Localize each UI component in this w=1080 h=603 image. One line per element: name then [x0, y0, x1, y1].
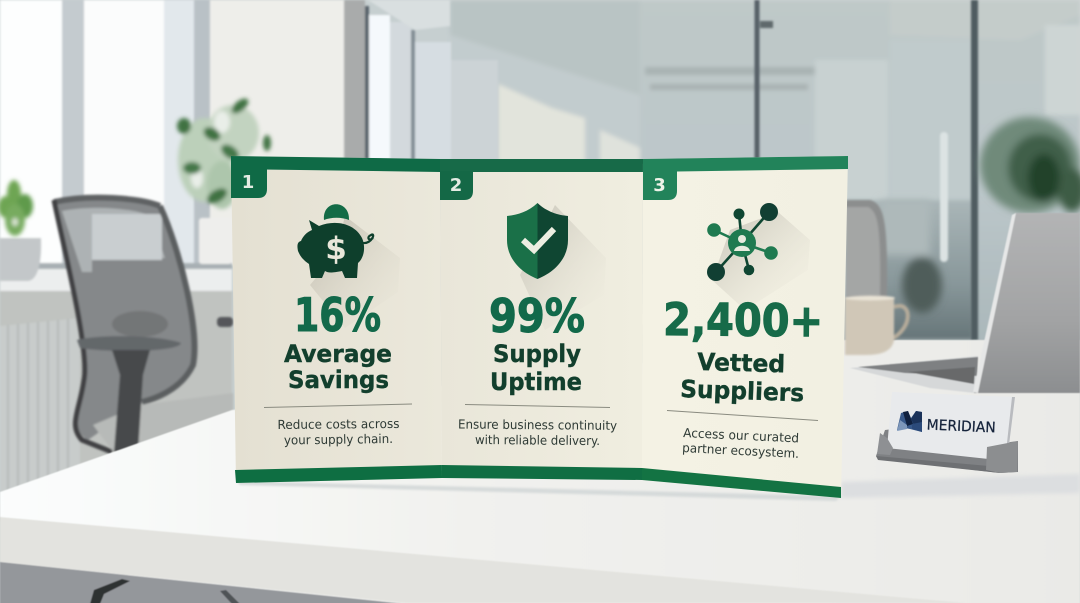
- desk surface: [0, 340, 1080, 603]
- mug: [845, 296, 908, 355]
- plant: window sill: [177, 96, 271, 209]
- description: [458, 417, 618, 448]
- card: [887, 392, 1015, 461]
- description: Ensure business continuity: [458, 417, 618, 433]
- left desk chair: [54, 196, 233, 452]
- icon: shield with check: [507, 203, 606, 330]
- stat 16%: 16%: [294, 288, 381, 342]
- label: supply uptime: Supply: [493, 340, 581, 368]
- panel 2 number tab: 2: [450, 175, 462, 196]
- plant: right behind laptop: [980, 117, 1080, 213]
- panel cast shadow on desk: [841, 474, 1080, 498]
- description: [682, 425, 799, 461]
- panel 1 number tab: 1: [242, 172, 254, 193]
- holder front: [876, 456, 1000, 473]
- panel 3 footer band: [642, 468, 841, 498]
- label: average savings: [284, 340, 392, 394]
- panel 3: vetted suppliers: [642, 156, 848, 498]
- label: average savings: Savings: [288, 366, 389, 394]
- panel 2 number tab: [440, 171, 473, 200]
- panel 1 header band: [231, 156, 440, 172]
- label: average savings: Average: [284, 340, 392, 368]
- description: your supply chain.: [284, 431, 393, 447]
- description: [277, 416, 400, 447]
- business card holder with Meridian card: [876, 392, 1018, 473]
- panel 2 footer band: [442, 465, 642, 480]
- panel 2 header band: [440, 159, 643, 172]
- panel 1 footer band: [235, 465, 442, 483]
- panel 3 header band: [643, 156, 848, 172]
- label: vetted suppliers: Vetted: [697, 348, 786, 378]
- panel 3 number tab: 3: [653, 175, 666, 196]
- panel 2: supply uptime: [440, 159, 643, 480]
- icon: supplier network: [707, 203, 810, 310]
- stat 2,400+: 2,400+: [663, 293, 823, 347]
- logo wordmark: MERIDIAN: [926, 417, 996, 436]
- description: with reliable delivery.: [475, 432, 600, 448]
- label: supply uptime: [490, 340, 582, 396]
- panel 3 number tab: [643, 171, 677, 200]
- label: vetted suppliers: [680, 348, 805, 407]
- description: Access our curated: [683, 425, 799, 445]
- label: vetted suppliers: Suppliers: [680, 375, 805, 407]
- icon: piggy bank: [297, 204, 400, 328]
- description: Reduce costs across: [277, 416, 400, 432]
- panel 1: average savings: [231, 156, 442, 483]
- icon: piggy bank: $: [325, 231, 347, 267]
- description: partner ecosystem.: [682, 440, 799, 461]
- holder back: [876, 429, 1018, 473]
- logo mark: [897, 411, 922, 432]
- plant: left window pot: [0, 180, 33, 236]
- tri-fold infographic: [231, 156, 848, 498]
- stat 99%: 99%: [489, 289, 585, 343]
- label: supply uptime: Uptime: [490, 368, 582, 396]
- laptop: [850, 213, 1080, 393]
- panel 1 number tab: [231, 168, 267, 198]
